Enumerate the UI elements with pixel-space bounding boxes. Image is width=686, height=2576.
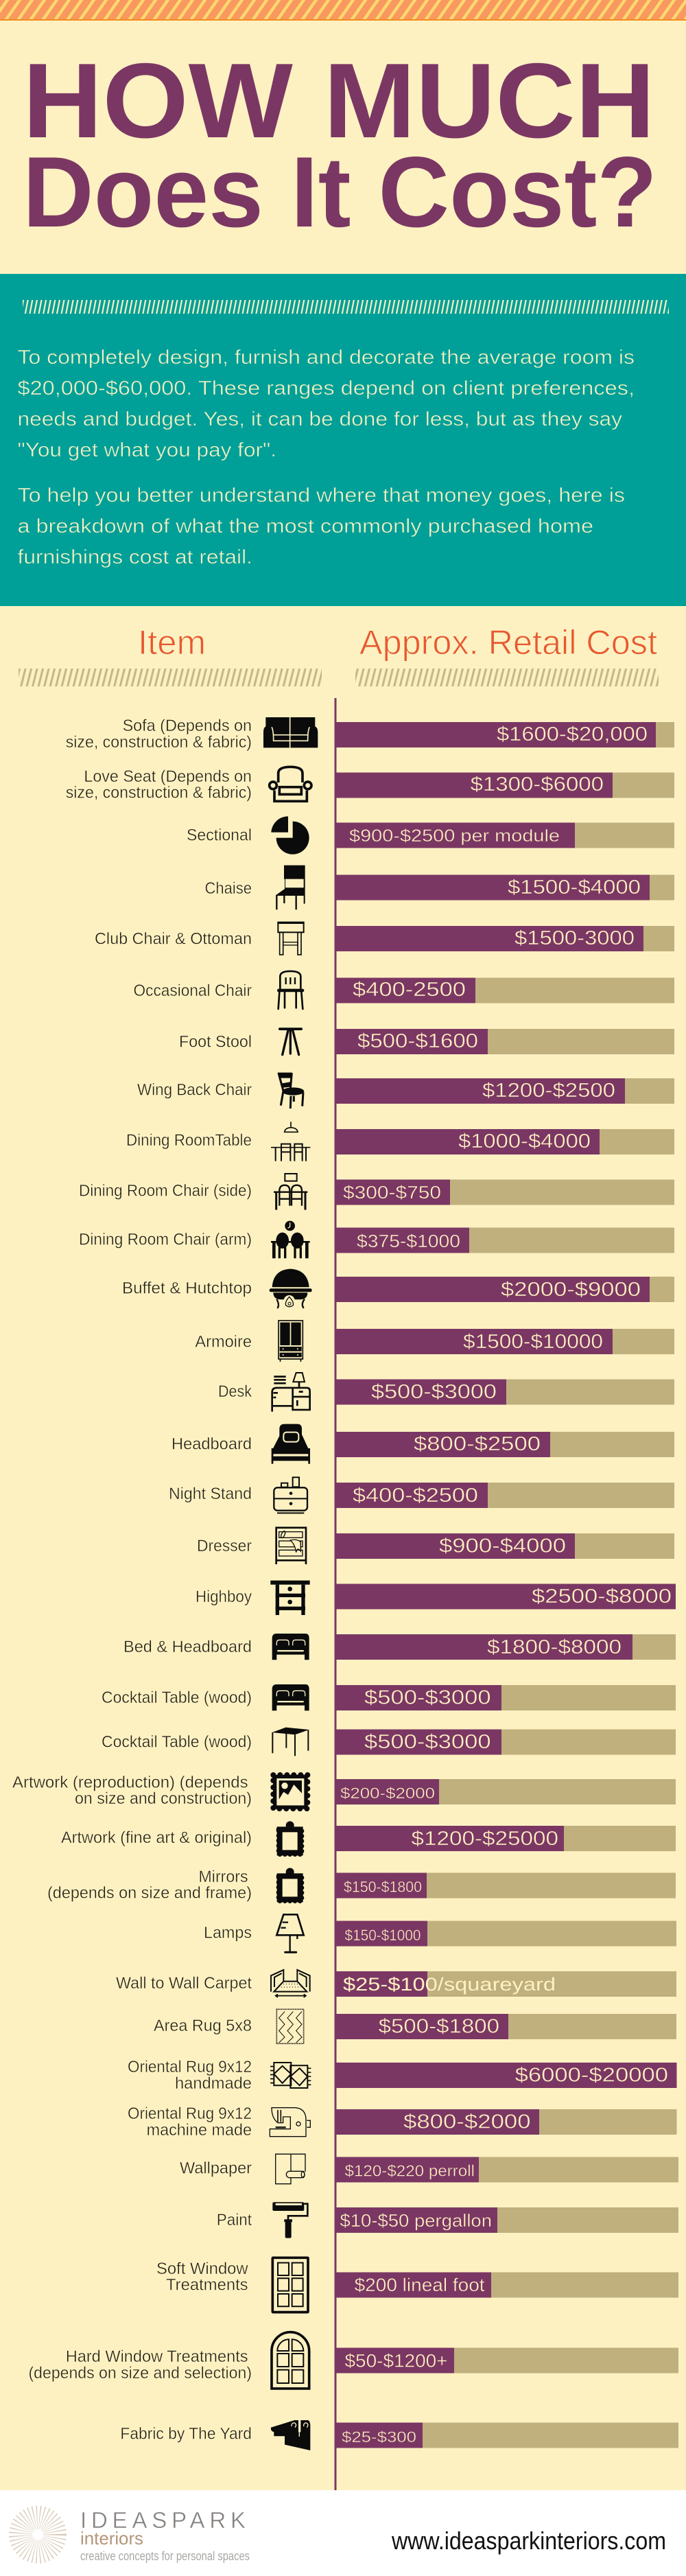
row: dining room table: $1000-$4000 [458,1130,591,1152]
row: headboard: Headboard [172,1435,252,1454]
icon: occasional chair [277,971,304,1009]
row: armoire: $1500-$10000 [463,1331,603,1353]
row: bed and headboard: $1800-$8000 [487,1636,622,1658]
panel: footer [0,2490,686,2576]
row: club chair [95,922,674,955]
icon: dining table [271,1122,310,1161]
icon: dining chair arm [271,1221,310,1258]
row: cocktail table 1 [102,1684,676,1710]
row: wall to wall carpet [116,1970,676,1997]
row: sofa: $1600-$20,000 [497,723,648,745]
row: oriental rug machine made: machine made [147,2121,252,2139]
row: cocktail table 2: Cocktail Table (wood) [102,1732,252,1752]
row: night stand: $400-$2500 [353,1485,478,1507]
row: mirrors: Mirrors [199,1868,248,1886]
title: HOW MUCH [23,41,655,160]
row: oriental rug machine made: Oriental Rug 9x12 [128,2104,252,2123]
icon: lamp [276,1914,304,1953]
row: cocktail table 1: Cocktail Table (wood) [102,1689,252,1707]
logo: spark burst [21,2518,55,2552]
row: artwork reproduction: Artwork (reproduction) (depends [12,1774,248,1791]
row: chaise: $1500-$4000 [508,877,641,898]
icon: chaise chair [276,866,305,909]
row: oriental rug handmade: $6000-$20000 [515,2065,668,2087]
row: soft window treatments: $200 lineal foot [355,2275,485,2295]
icon: desk [272,1373,310,1412]
row: artwork reproduction: $200-$2000 [340,1785,435,1802]
icon: oriental rug [270,2063,311,2088]
title [23,41,657,248]
icon: dresser [276,1528,306,1564]
row: artwork fine art: $1200-$25000 [412,1828,558,1850]
logo text: IDEASPARK [80,2507,246,2533]
row: club chair: Club Chair & Ottoman [95,929,252,948]
row: oriental rug handmade: handmade [175,2074,252,2093]
panel: introduction [0,274,686,606]
row: sofa [66,717,674,752]
icon: bed [272,1634,309,1660]
icon: area rug [276,2009,304,2043]
row: love seat: Love Seat (Depends on [84,767,252,786]
row: highboy: $2500-$8000 [532,1586,672,1608]
icon: arched window [272,2332,309,2389]
row: area rug [154,2009,676,2043]
row: artwork reproduction [12,1774,676,1809]
intro text: a breakdown of what the most commonly purchased home [18,515,593,537]
row: oriental rug handmade: Oriental Rug 9x12 [128,2058,252,2076]
row: dining room chair side: $300-$750 [343,1182,441,1203]
row: dining room table [126,1122,674,1161]
row: armoire: Armoire [195,1333,252,1351]
row: occasional chair: Occasional Chair [133,982,252,1000]
icon: buffet [270,1269,312,1308]
icon: carpet [271,1970,310,1997]
icon: wing back chair [278,1073,304,1109]
row: bed and headboard: Bed & Headboard [123,1638,252,1656]
row: paint [217,2202,678,2238]
intro text: To completely design, furnish and decorate the average room is [18,347,635,369]
row: wing back chair [137,1073,674,1109]
row: occasional chair [133,971,674,1009]
row: soft window treatments [156,2258,678,2312]
row: wallpaper [180,2154,678,2184]
row: night stand [169,1477,674,1513]
row: love seat: $1300-$6000 [471,774,604,796]
axis line [335,698,336,2490]
icon: window [272,2258,308,2312]
row: area rug: $500-$1800 [379,2016,499,2038]
heading: approx retail cost: Approx. Retail Cost [359,623,657,662]
row: wall to wall carpet: $25-$100/squareyard [343,1974,556,1995]
row: paint: Paint [217,2211,252,2229]
row: dining room chair arm: Dining Room Chair (arm) [79,1230,252,1249]
row: buffet: Buffet & Hutchtop [122,1279,252,1297]
row: highboy [196,1581,676,1615]
row: desk: $500-$3000 [371,1381,497,1403]
icon: cocktail table [272,1728,309,1756]
row: hard window treatments: (depends on size and selection) [29,2364,252,2382]
row: desk: Desk [218,1382,252,1401]
row: lamps: Lamps [204,1924,252,1942]
row: love seat: size, construction & fabric) [66,784,252,802]
row: dresser: Dresser [197,1537,252,1555]
icon: sectional [271,816,309,855]
row: artwork reproduction: on size and construction) [75,1789,252,1808]
intro text: "You get what you pay for". [18,439,276,461]
row: area rug: Area Rug 5x8 [154,2017,252,2035]
row: occasional chair: $400-2500 [353,979,466,1001]
row: artwork fine art: Artwork (fine art & original) [61,1829,252,1847]
row: oriental rug machine made: $800-$2000 [403,2111,531,2133]
row: mirrors: $150-$1800 [344,1879,422,1896]
row: buffet [122,1269,674,1308]
row: cocktail table 2: $500-$3000 [364,1731,491,1753]
icon: headboard bed [272,1424,310,1464]
row: sofa: size, construction & fabric) [66,733,252,752]
row: headboard [172,1424,674,1464]
intro text: $20,000-$60,000. These ranges depend on client preferences, [18,378,635,399]
icon: fabric [271,2420,310,2450]
row: dining room chair side [79,1174,674,1210]
row: paint: $10-$50 pergallon [340,2210,492,2231]
row: artwork fine art [61,1821,676,1855]
row: buffet: $2000-$9000 [501,1279,641,1301]
row: oriental rug handmade [128,2058,676,2093]
bar chart and item list [12,717,678,2450]
row: dresser [197,1528,674,1564]
icon: sewing machine [270,2108,310,2137]
row: dining room chair arm: $375-$1000 [357,1231,460,1251]
row: hard window treatments: Hard Window Treatments [66,2347,248,2366]
row: club chair: $1500-3000 [514,927,635,949]
intro text: To help you better understand where that money goes, here is [18,485,625,507]
logo text: interiors [80,2528,143,2549]
icon: ornate mirror [279,1868,302,1901]
row: fabric by the yard: Fabric by The Yard [120,2425,252,2444]
row: armoire [195,1321,674,1362]
row: dining room chair arm [79,1221,674,1258]
heading: item [19,623,322,686]
row: wall to wall carpet: Wall to Wall Carpet [116,1974,252,1993]
row: soft window treatments: Soft Window [156,2260,248,2278]
row: hard window treatments: $50-$1200+ [344,2351,447,2371]
row: foot stool [179,1028,674,1055]
row: cocktail table 2 [102,1728,676,1756]
row: dining room table: Dining RoomTable [126,1131,252,1150]
logo text: creative concepts for personal spaces [80,2549,250,2563]
intro text [18,347,635,568]
top stripe band [0,0,686,21]
icon: wallpaper [276,2154,305,2184]
intro text: needs and budget. Yes, it can be done for less, but as they say [18,408,623,430]
title: Does It Cost? [23,136,657,248]
row: wing back chair: $1200-$2500 [482,1080,615,1102]
row: sofa: Sofa (Depends on [123,717,252,735]
icon: armchair [270,767,311,801]
icon: bed [272,1684,309,1710]
icon: paint roller [272,2202,307,2238]
intro text: furnishings cost at retail. [18,546,252,568]
row: desk [218,1373,674,1412]
row: night stand: Night Stand [169,1485,252,1503]
icon: sofa [263,717,318,747]
icon: dining chair side [274,1174,307,1210]
icon: highboy [270,1581,310,1615]
logo text [80,2507,250,2563]
row: cocktail table 1: $500-$3000 [364,1687,491,1709]
row: chaise: Chaise [204,879,252,898]
row: dresser: $900-$4000 [439,1535,566,1557]
row: foot stool: Foot Stool [179,1032,252,1052]
row: bed and headboard [123,1634,676,1660]
row: wing back chair: Wing Back Chair [137,1080,252,1100]
row: fabric by the yard: $25-$300 [342,2428,416,2446]
icon: framed picture [273,1775,307,1809]
icon: night stand [274,1477,307,1513]
row: sectional: Sectional [187,826,252,844]
heading: approx retail cost [355,623,659,686]
row: sectional: $900-$2500 per module [349,826,560,846]
icon: foot stool [279,1028,303,1055]
icon: ornate frame [279,1821,302,1855]
row: mirrors [47,1868,676,1903]
row: dining room chair side: Dining Room Chair (side) [79,1181,252,1200]
row: love seat [66,767,674,802]
row: wallpaper: Wallpaper [180,2159,252,2178]
row: highboy: Highboy [196,1588,252,1606]
row: headboard: $800-$2500 [414,1433,541,1455]
heading: item: Item [138,623,206,662]
row: lamps: $150-$1000 [344,1927,421,1944]
row: fabric by the yard [120,2420,678,2450]
row: chaise [204,866,674,909]
row: foot stool: $500-$1600 [357,1030,478,1052]
icon: club chair [277,922,305,955]
row: mirrors: (depends on size and frame) [47,1884,252,1903]
icon: armoire [279,1321,303,1362]
row: oriental rug machine made [128,2104,676,2139]
row: lamps [204,1914,676,1953]
row: wallpaper: $120-$220 perroll [344,2162,475,2180]
row: hard window treatments [29,2332,678,2389]
row: soft window treatments: Treatments [166,2276,248,2294]
row: sectional [187,816,674,855]
